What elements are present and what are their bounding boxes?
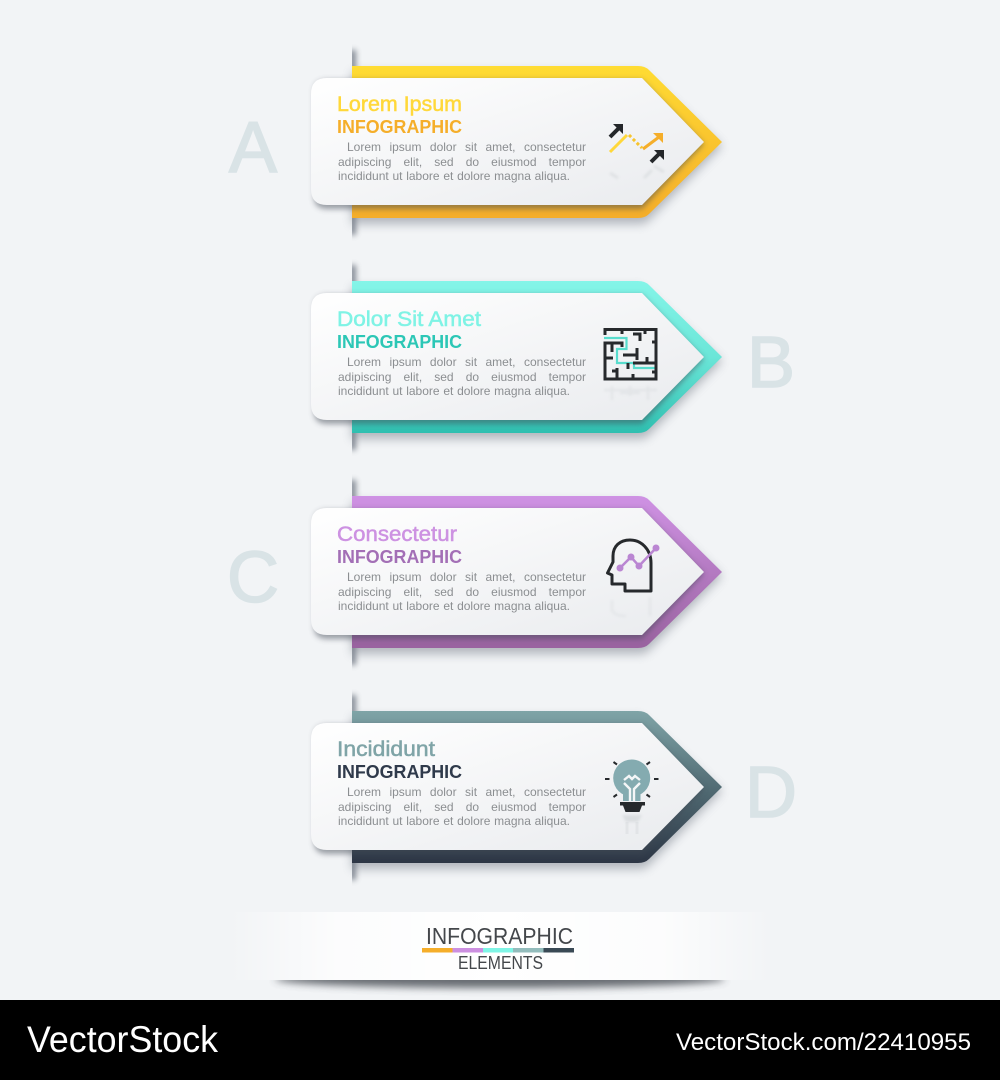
body text C <box>338 570 586 613</box>
watermark id text: VectorStock.com/22410955 <box>676 1029 971 1056</box>
title A: Lorem Ipsum <box>337 93 462 116</box>
white card A <box>311 78 704 209</box>
body text C: incididunt ut labore et dolore magna aliqua. <box>338 599 570 613</box>
subtitle C: INFOGRAPHIC <box>337 547 462 567</box>
arrow backing shape B <box>349 265 722 450</box>
footer colour bar <box>422 948 574 952</box>
letter A: A <box>229 108 277 188</box>
body text A: incididunt ut labore et dolore magna aliqua. <box>338 169 570 183</box>
body text C: adipiscing elit, sed do eiusmod tempor <box>338 585 586 599</box>
body text A <box>338 140 586 183</box>
footer subheading: ELEMENTS <box>458 953 543 973</box>
body text B: adipiscing elit, sed do eiusmod tempor <box>338 370 586 384</box>
panel: card D Incididunt <box>310 692 797 884</box>
body text C: Lorem ipsum dolor sit amet, consectetur <box>347 570 586 584</box>
title B: Dolor Sit Amet <box>337 308 481 331</box>
arrow backing shape C <box>349 480 722 665</box>
body text D: Lorem ipsum dolor sit amet, consectetur <box>347 785 586 799</box>
icon: light bulb <box>605 760 658 834</box>
white card D <box>311 723 704 854</box>
body text A: Lorem ipsum dolor sit amet, consectetur <box>347 140 586 154</box>
panel: card C Consectetur <box>227 476 724 668</box>
icon: maze <box>604 329 657 400</box>
watermark logo text: VectorStock <box>27 1019 218 1060</box>
letter D: D <box>745 753 797 833</box>
body text D: incididunt ut labore et dolore magna aliqua. <box>338 814 570 828</box>
white card B <box>311 293 704 424</box>
letter B: B <box>747 323 795 403</box>
footer heading: INFOGRAPHIC <box>426 923 573 949</box>
body text B: Lorem ipsum dolor sit amet, consectetur <box>347 355 586 369</box>
body text A: adipiscing elit, sed do eiusmod tempor <box>338 155 586 169</box>
body text D <box>338 785 586 828</box>
body text B <box>338 355 586 398</box>
body text B: incididunt ut labore et dolore magna aliqua. <box>338 384 570 398</box>
footer logo panel <box>272 912 728 994</box>
arrow backing shape D <box>349 695 722 880</box>
icon: growth arrows <box>610 124 664 178</box>
panel: card B Dolor Sit Amet <box>310 262 795 454</box>
subtitle A: INFOGRAPHIC <box>337 117 462 137</box>
watermark band <box>0 1000 1000 1080</box>
subtitle B: INFOGRAPHIC <box>337 332 462 352</box>
arrow backing shape A <box>349 50 722 235</box>
panel: card A Lorem Ipsum <box>228 46 724 238</box>
letter C: C <box>227 538 279 618</box>
title C: Consectetur <box>337 523 457 546</box>
white card C <box>311 508 704 639</box>
title D: Incididunt <box>337 738 435 761</box>
icon: head with chart <box>608 540 660 616</box>
body text D: adipiscing elit, sed do eiusmod tempor <box>338 800 586 814</box>
subtitle D: INFOGRAPHIC <box>337 762 462 782</box>
